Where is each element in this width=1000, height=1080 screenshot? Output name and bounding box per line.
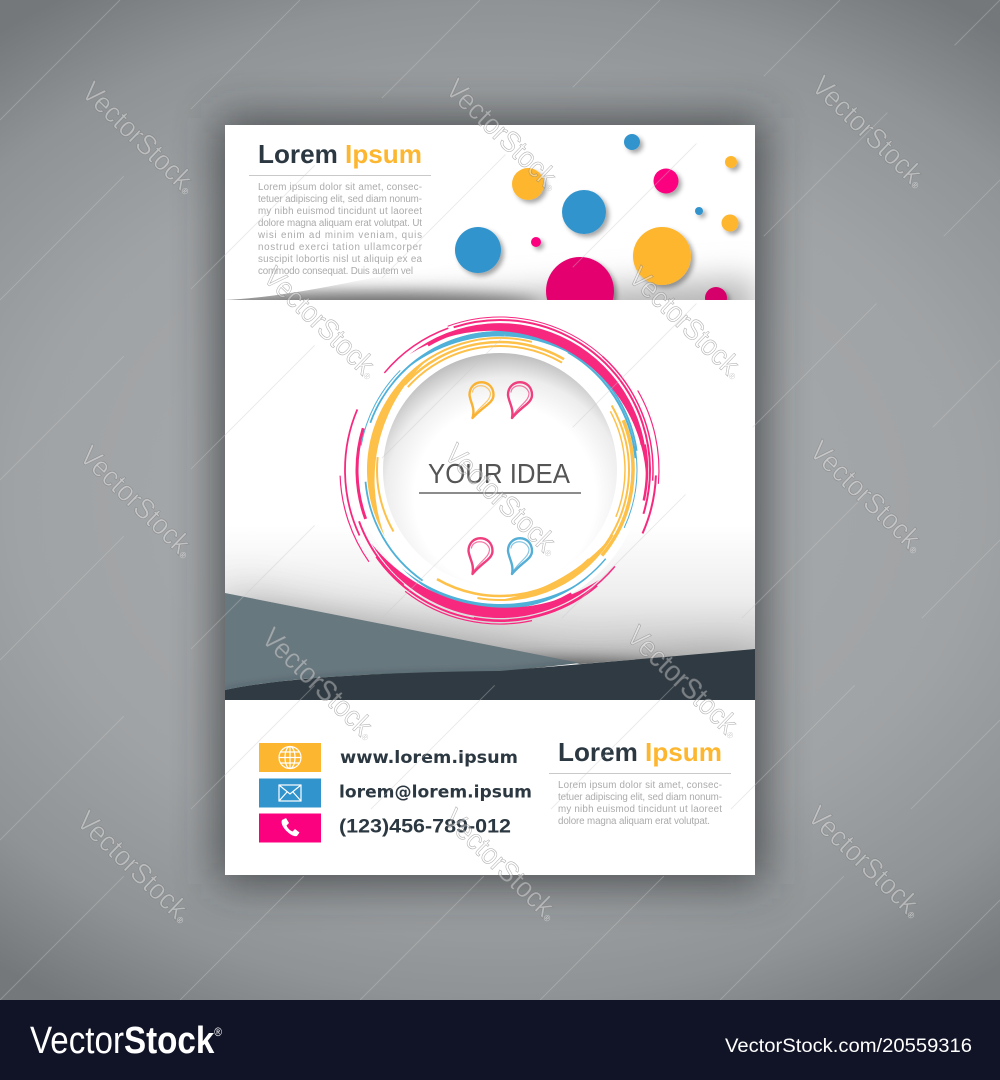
watermarks: VectorStock® (255, 622, 383, 747)
watermarks: VectorStock® (75, 76, 203, 201)
text block: closing paragraph: tetuer adipiscing elit, sed diam nonum- (558, 792, 722, 803)
watermarks: VectorStock® (620, 620, 748, 745)
chart: brush ring (277, 247, 723, 693)
watermarks: VectorStock® (438, 438, 566, 563)
flyer drop shadow (218, 118, 764, 884)
watermarks: VectorStock® (70, 805, 198, 930)
text: website: www.lorem.ipsum (340, 748, 518, 768)
pin: blue (508, 538, 532, 574)
text block: intro paragraph: wisi enim ad minim veniam, quis (257, 230, 422, 241)
watermarks (70, 70, 933, 930)
yellow strokes (314, 284, 686, 656)
dark band (225, 649, 755, 700)
pin: pink top (508, 382, 532, 418)
text block: closing paragraph: Lorem ipsum dolor sit amet, consec- (558, 780, 722, 791)
watermarks: VectorStock® (801, 800, 929, 925)
heading: Lorem Ipsum bottom: Lorem Ipsum (558, 737, 722, 767)
icon: globe (259, 743, 321, 772)
watermarks: VectorStock® (439, 73, 567, 198)
watermarks: VectorStock® (73, 440, 201, 565)
fold shading middle (225, 554, 755, 664)
text block: intro paragraph: tetuer adipiscing elit, sed diam nonum- (258, 194, 422, 205)
inner circle (383, 353, 617, 587)
pin: yellow (470, 382, 494, 418)
blue strokes (306, 276, 694, 664)
white disc behind ring (357, 327, 643, 613)
text: phone: (123)456-789-012 (339, 816, 511, 838)
heading: Lorem Ipsum: Lorem Ipsum (258, 139, 422, 169)
panel: flyer top (225, 125, 755, 300)
watermarks: VectorStock® (437, 803, 565, 928)
icon: envelope (259, 778, 321, 808)
icon: phone (259, 814, 321, 842)
text block: intro paragraph: suscipit lobortis nisl ut aliquip ex ea (258, 254, 423, 265)
heading: YOUR IDEA: YOUR IDEA (428, 458, 570, 489)
panel: flyer bottom (225, 700, 755, 875)
text block: closing paragraph: dolore magna aliquam erat volutpat. (558, 816, 710, 827)
text block: intro paragraph: my nibh euismod tincidunt ut laoreet (258, 206, 422, 217)
decorative dots (455, 134, 744, 300)
fold shading top (226, 262, 755, 300)
slate band (225, 593, 579, 690)
watermarks: VectorStock® (805, 70, 933, 195)
text block: intro paragraph: commodo consequat. Duis autem vel (258, 266, 413, 277)
footer logo: VectorStock (30, 1020, 227, 1062)
text: email: lorem@lorem.ipsum (339, 782, 532, 802)
footer logo: ® (214, 1025, 222, 1039)
text block: intro paragraph: nostrud exerci tation ullamcorper (258, 242, 423, 253)
text block: intro paragraph: dolore magna aliquam erat volutpat. Ut (258, 218, 422, 229)
watermarks: VectorStock® (803, 435, 931, 560)
text block: intro paragraph (257, 182, 423, 277)
footer url: VectorStock.com/20559316 (725, 1036, 972, 1057)
text block: closing paragraph: my nibh euismod tincidunt ut laoreet (558, 804, 722, 815)
watermarks: VectorStock® (257, 261, 385, 386)
text block: closing paragraph (558, 780, 722, 827)
pink strokes (277, 247, 723, 693)
text block: intro paragraph: Lorem ipsum dolor sit amet, consec- (258, 182, 422, 193)
pin: pink bottom (468, 538, 492, 574)
panel: flyer middle (225, 300, 755, 730)
watermarks: VectorStock® (622, 261, 750, 386)
footer banner (0, 1000, 1000, 1080)
